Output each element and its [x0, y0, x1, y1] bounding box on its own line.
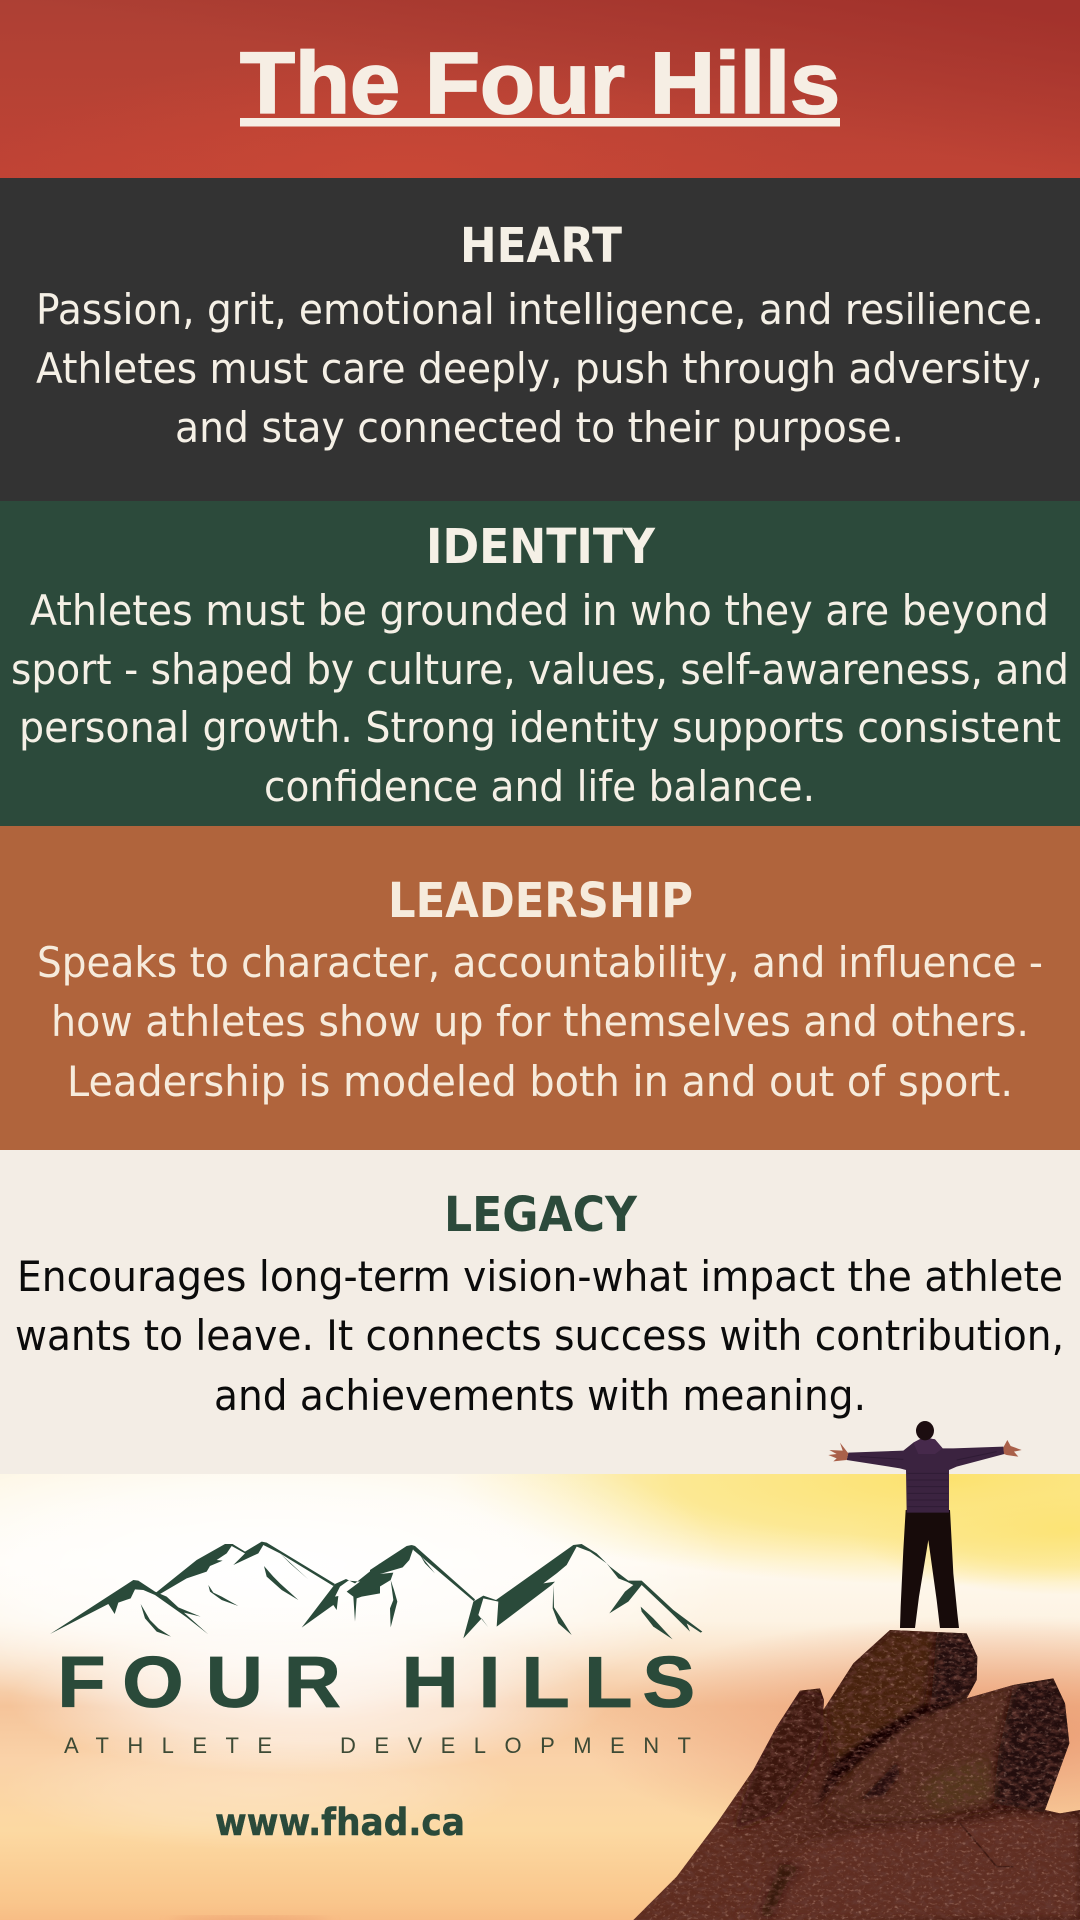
sunset sky background — [0, 1474, 1080, 1920]
text: leadership description: how athletes show up for themselves and others. — [51, 997, 1029, 1046]
legs — [900, 1510, 959, 1628]
text: heart description — [36, 285, 1044, 452]
panel: identity — [0, 501, 1080, 826]
text: identity description — [11, 586, 1069, 811]
website url: www.fhad.ca — [215, 1800, 465, 1844]
text: identity description: confidence and life balance. — [264, 762, 815, 811]
text: heart description: Passion, grit, emotional intelligence, and resilience. — [36, 285, 1044, 334]
text: leadership description: Leadership is modeled both in and out of sport. — [67, 1057, 1013, 1106]
icon: mountain range, right — [370, 1544, 702, 1639]
icon: mountain range, left — [50, 1542, 380, 1637]
heading: identity: IDENTITY — [426, 519, 656, 575]
panel: heart — [0, 178, 1080, 501]
text: identity description: Athletes must be grounded in who they are beyond — [30, 586, 1049, 635]
tagline: development: DEVELOPMENT — [340, 1733, 691, 1758]
text: heart description: Athletes must care deeply, push through adversity, — [36, 344, 1043, 393]
tagline: athlete: ATHLETE — [64, 1733, 272, 1758]
jacket and arms — [847, 1437, 1004, 1513]
panel: leadership — [0, 826, 1080, 1150]
heading: leadership: LEADERSHIP — [388, 873, 693, 929]
text: heart description: and stay connected to their purpose. — [175, 403, 904, 452]
head — [916, 1421, 934, 1440]
text: leadership description: Speaks to character, accountability, and influence - — [37, 938, 1043, 987]
title: The Four Hills — [240, 35, 840, 132]
text: identity description: personal growth. Strong identity supports consistent — [19, 703, 1061, 752]
logo: four hills athlete development — [50, 1542, 702, 1758]
panel: title banner — [0, 0, 1080, 178]
text: legacy description — [15, 1252, 1064, 1420]
text: legacy description: and achievements with meaning. — [214, 1371, 866, 1420]
image: person with raised arms — [828, 1421, 1022, 1628]
hands — [828, 1440, 1022, 1461]
heading: legacy: LEGACY — [444, 1187, 638, 1243]
image: rocky summit — [620, 1620, 1080, 1920]
wordmark: four hills: FOURHILLS — [57, 1642, 695, 1723]
heading: heart: HEART — [460, 218, 622, 274]
panel: legacy — [0, 1150, 1080, 1474]
text: leadership description — [37, 938, 1043, 1106]
